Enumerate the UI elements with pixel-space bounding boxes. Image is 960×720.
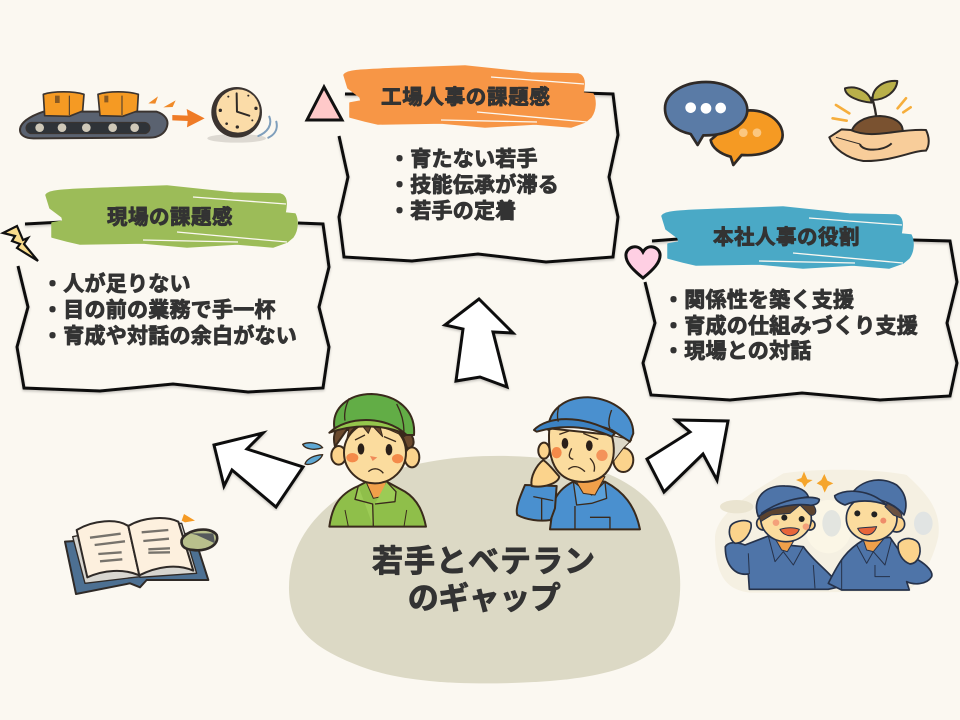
arrow: to field issues: [214, 433, 303, 507]
text block: head office HR role: ・現場との対話: [663, 340, 812, 363]
panel frame: field issues: [17, 222, 329, 392]
arrow: to head office HR: [647, 420, 728, 492]
text block: head office HR role: ・育成の仕組みづくり支援: [663, 314, 918, 338]
brush heading: factory HR issues: [344, 66, 595, 127]
icon: heart: [626, 247, 660, 278]
icon: conveyor and clock: [20, 87, 277, 143]
left worker: [725, 536, 840, 589]
icon: pink triangle: [307, 87, 342, 120]
text block: field issues: ・育成や対話の余白がない: [42, 324, 297, 348]
icon: open book: [65, 514, 217, 594]
icon: sprout in hand: [829, 81, 929, 161]
icon: speech bubbles: [665, 82, 783, 165]
text block: head office HR role: ・関係性を築く支援: [663, 289, 854, 312]
right worker: [828, 537, 932, 590]
text block: field issues: ・人が足りない: [42, 272, 191, 296]
illustration: two cheerful workers: [715, 470, 939, 593]
text block: field issues: ・目の前の業務で手一杯: [42, 299, 276, 322]
central blob: gap background: [289, 456, 680, 683]
veteran body: [550, 482, 640, 529]
text block: factory HR issues: ・技能伝承が滞る: [389, 173, 559, 197]
heading: gap between young and veteran: 若手とベテラン: [372, 544, 596, 579]
young worker body: [329, 482, 426, 527]
text block: factory HR issues: ・若手の定着: [389, 200, 516, 223]
brush heading: field issues: 現場の課題感: [107, 205, 233, 229]
brush heading: head office HR role: [662, 207, 913, 268]
panel frame: head office HR role: [643, 239, 957, 400]
icon: veteran worker: [517, 397, 640, 529]
panel: field issues: [17, 186, 329, 392]
text block: factory HR issues: ・育たない若手: [389, 148, 538, 171]
heading: gap between young and veteran: のギャップ: [408, 581, 561, 616]
brush heading: field issues: [46, 186, 297, 247]
panel: head office HR role: [643, 207, 957, 400]
panel frame: factory HR issues: [339, 93, 618, 262]
panel: factory HR issues: [339, 66, 618, 262]
icon: young worker: [303, 394, 426, 527]
brush heading: factory HR issues: 工場人事の課題感: [381, 85, 551, 109]
brush heading: head office HR role: 本社人事の役割: [713, 226, 860, 249]
arrow: up to factory HR: [445, 299, 513, 387]
icon: lightning: [3, 226, 38, 261]
